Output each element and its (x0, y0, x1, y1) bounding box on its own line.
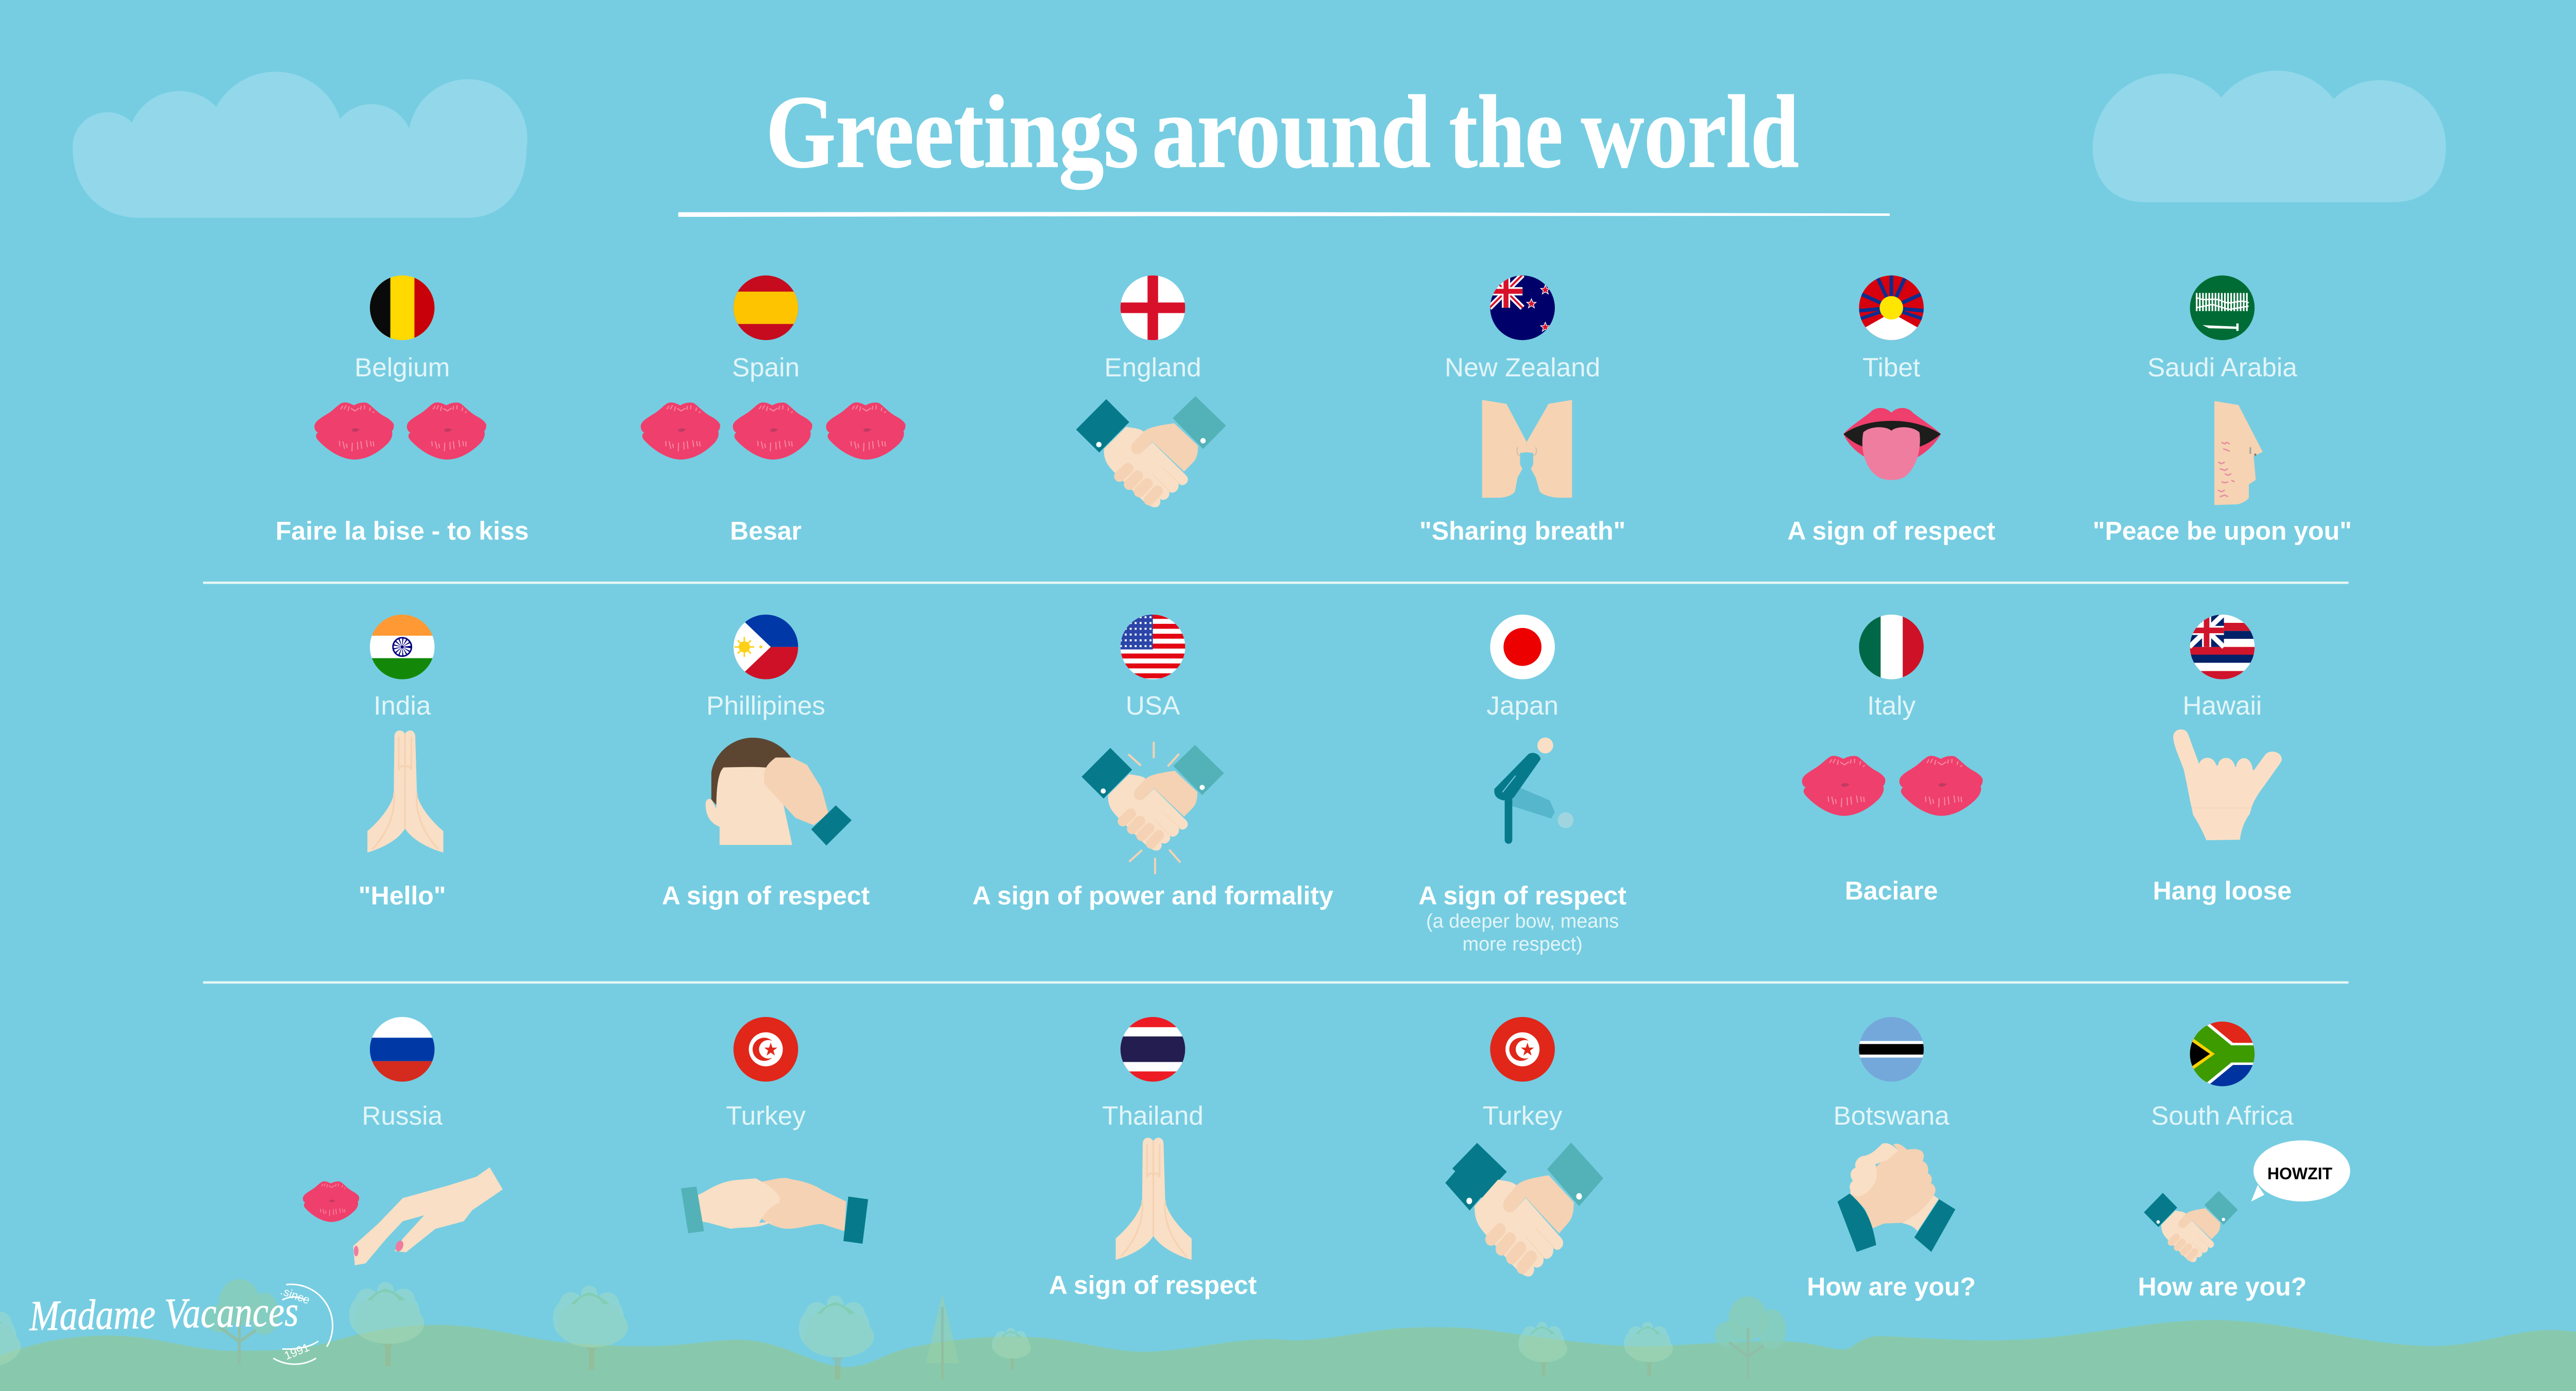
caption: Faire la bise - to kiss (276, 517, 529, 546)
flag: South Africa (2186, 1017, 2259, 1090)
panel: Philippines (662, 610, 870, 910)
logo: Madame Vacances stamp: 1991 (282, 1341, 311, 1362)
caption with note (1418, 881, 1626, 955)
caption: Besar (730, 517, 802, 546)
title: the (1449, 74, 1563, 190)
icon: praying hands (367, 731, 443, 853)
icon: tongue out (1843, 408, 1941, 480)
caption with note: more respect) (1463, 934, 1583, 955)
icon: bowing figure (1494, 738, 1573, 840)
country name: Hawaii (2183, 691, 2262, 720)
icon: two kisses (314, 402, 486, 460)
caption: Hang loose (2153, 876, 2292, 905)
flag: Turkey (733, 1016, 799, 1082)
icon: hand clasp (681, 1178, 868, 1244)
speech bubble: HOWZIT (2251, 1141, 2350, 1201)
panel: England (1076, 275, 1226, 507)
flag: Russia (369, 1016, 435, 1084)
country name: USA (1126, 691, 1180, 720)
flag: New Zealand (1489, 275, 1555, 341)
row divider 1 (203, 582, 2348, 584)
flag: Hawaii (2189, 614, 2255, 681)
flag: Philippines (734, 615, 799, 679)
speech bubble: HOWZIT: HOWZIT (2267, 1164, 2333, 1183)
flag: England (1120, 275, 1186, 341)
row divider 2 (203, 981, 2348, 983)
panel: Turkey (clasped hands) (681, 1016, 868, 1244)
country name: Tibet (1862, 352, 1920, 382)
title underline (679, 212, 1890, 217)
title: world (1581, 74, 1799, 190)
country name: Belgium (354, 352, 450, 382)
title: around (1152, 74, 1431, 190)
flag: Japan (1489, 614, 1555, 680)
panel: Italy (1802, 614, 1982, 905)
panel: Thailand (1049, 1016, 1257, 1299)
caption with note: A sign of respect (1418, 881, 1626, 910)
icon: clasped raised hands (1838, 1143, 1955, 1252)
icon: three kisses (641, 402, 906, 460)
flag: Thailand (1120, 1016, 1186, 1082)
panel: Russia (303, 1016, 503, 1265)
country name: Botswana (1834, 1101, 1950, 1130)
flag: India (369, 614, 435, 681)
country name: Thailand (1102, 1101, 1204, 1130)
caption: "Peace be upon you" (2093, 517, 2352, 546)
right cloud (2093, 71, 2446, 202)
panel: Spain (641, 275, 906, 546)
caption: "Hello" (359, 881, 446, 910)
icon: face with kiss marks (2214, 401, 2263, 505)
title (766, 74, 1799, 190)
caption: "Sharing breath" (1419, 517, 1625, 546)
logo: Madame Vacances stamp: Madame Vacances (29, 1288, 299, 1340)
panel: Botswana (1807, 1016, 1976, 1301)
caption: A sign of respect (1787, 517, 1995, 546)
icon: two faces pressing noses (1482, 400, 1572, 498)
country name: Spain (732, 352, 800, 382)
flag: Botswana (1858, 1016, 1924, 1082)
caption with note: (a deeper bow, means (1426, 910, 1619, 932)
flag: Turkey (1489, 1016, 1555, 1082)
panel: Japan (1418, 614, 1626, 955)
icon: small handshake (2144, 1191, 2238, 1262)
flag: Italy (1858, 614, 1925, 680)
country name: India (374, 691, 431, 720)
hills and trees landscape (0, 1279, 2576, 1391)
icon: large handshake (1445, 1143, 1603, 1277)
country name: Phillipines (706, 691, 825, 720)
country name: Turkey (1483, 1101, 1563, 1130)
caption: Baciare (1845, 876, 1938, 905)
panel: Turkey (handshake) (1445, 1016, 1603, 1277)
icon: kiss on the hand (303, 1167, 503, 1265)
icon: handshake with sparkles (1081, 742, 1224, 874)
panel: USA (972, 614, 1333, 910)
country name: England (1105, 352, 1201, 382)
panel: Tibet (1787, 272, 1995, 546)
country name: Saudi Arabia (2147, 352, 2297, 382)
icon: hand to forehead gesture (706, 738, 852, 845)
flag: Tibet (1859, 275, 1924, 340)
title: Greetings (766, 74, 1139, 190)
icon: praying hands (1116, 1138, 1192, 1260)
panel: New Zealand (1419, 275, 1625, 546)
country name: New Zealand (1445, 352, 1600, 382)
caption: A sign of respect (662, 881, 870, 910)
panel: South Africa (2138, 1017, 2350, 1301)
caption: A sign of power and formality (972, 881, 1333, 910)
country name: South Africa (2151, 1101, 2294, 1130)
logo: Madame Vacances stamp (29, 1284, 333, 1364)
left cloud (73, 72, 528, 218)
flag: Spain (733, 275, 799, 341)
flag: Saudi Arabia (2189, 275, 2255, 341)
panel: Saudi Arabia (2093, 275, 2352, 546)
country name: Turkey (726, 1101, 806, 1130)
icon: handshake (1076, 396, 1226, 507)
caption: How are you? (2138, 1273, 2307, 1301)
logo: Madame Vacances stamp: .since (279, 1284, 312, 1307)
flag: USA (1120, 614, 1186, 680)
panel: India (359, 614, 446, 910)
panel: Hawaii (2153, 614, 2292, 905)
caption: How are you? (1807, 1273, 1976, 1301)
icon: two kisses (1802, 756, 1982, 816)
country name: Japan (1486, 691, 1558, 720)
panel: Belgium (276, 275, 529, 546)
caption: A sign of respect (1049, 1270, 1257, 1299)
country name: Russia (362, 1101, 443, 1130)
icon: shaka hand (2173, 730, 2282, 840)
flag: Belgium (369, 275, 436, 341)
country name: Italy (1867, 691, 1916, 720)
